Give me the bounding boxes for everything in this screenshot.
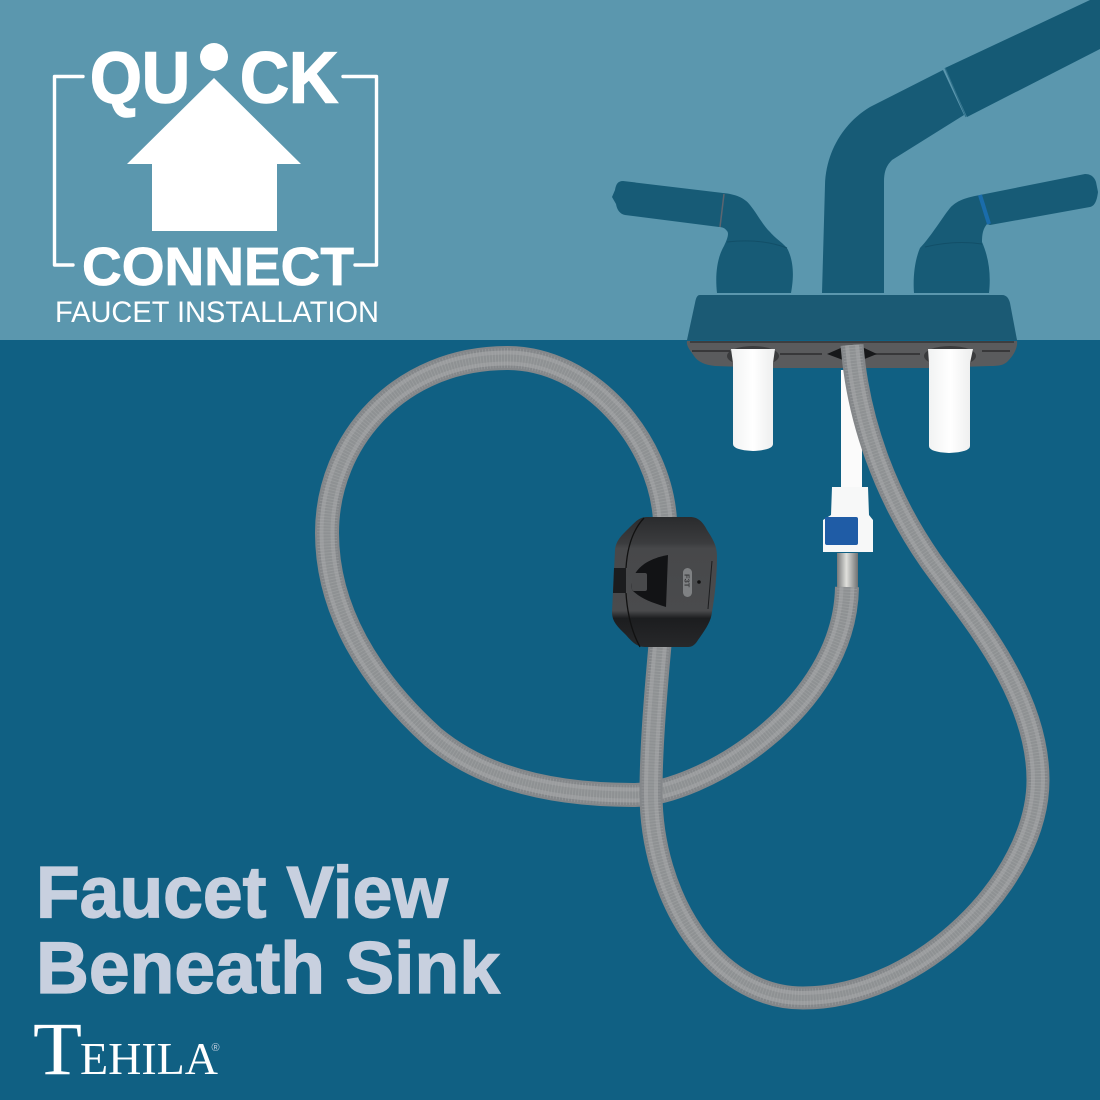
hose: return loop <box>327 358 847 795</box>
white supply tube and quick connector <box>823 370 873 588</box>
logo subtitle: FAUCET INSTALLATION <box>55 296 379 329</box>
centre hole <box>827 347 877 360</box>
heading line 1: Faucet View <box>36 852 448 934</box>
deck underside <box>687 341 1017 368</box>
weight label badge: F3T <box>682 574 692 588</box>
background: bottom band <box>0 340 1100 1100</box>
right handle <box>914 174 1098 293</box>
blue clip <box>825 517 858 545</box>
weight seam <box>626 518 644 647</box>
hose: main from faucet <box>651 345 1038 998</box>
brand wordmark: EHILA <box>80 1033 218 1084</box>
pull-down spray head <box>945 0 1100 117</box>
weight body <box>612 517 717 647</box>
logo word: CK: CK <box>240 38 338 118</box>
heading line 2: Beneath Sink <box>36 928 500 1009</box>
weight clip <box>632 573 647 591</box>
brand wordmark initial: T <box>33 1008 82 1091</box>
logo word: QU: QU <box>90 38 190 118</box>
icon: house <box>127 78 301 231</box>
spout <box>822 70 964 293</box>
brand logo: Tehila <box>33 1008 220 1091</box>
mounting rings <box>727 346 779 366</box>
weight side latch <box>613 568 626 593</box>
right white stem <box>928 349 973 453</box>
logo dot on the i <box>200 43 228 71</box>
faucet <box>612 0 1100 453</box>
connector collar <box>823 487 873 552</box>
metal ferrule <box>837 553 858 588</box>
heading <box>36 852 500 1009</box>
logo: Quick Connect <box>54 38 379 329</box>
logo bracket frame <box>54 76 376 265</box>
weight clip recess <box>632 555 668 607</box>
logo word: CONNECT: CONNECT <box>82 237 354 297</box>
braided hose loop <box>327 345 1038 998</box>
faucet deck plate <box>687 295 1017 340</box>
left handle <box>612 181 793 293</box>
registered mark: ® <box>212 1042 220 1054</box>
left white stem <box>731 349 775 451</box>
hose weight <box>612 517 717 647</box>
background: top band <box>0 0 1100 340</box>
white tube <box>841 370 862 487</box>
